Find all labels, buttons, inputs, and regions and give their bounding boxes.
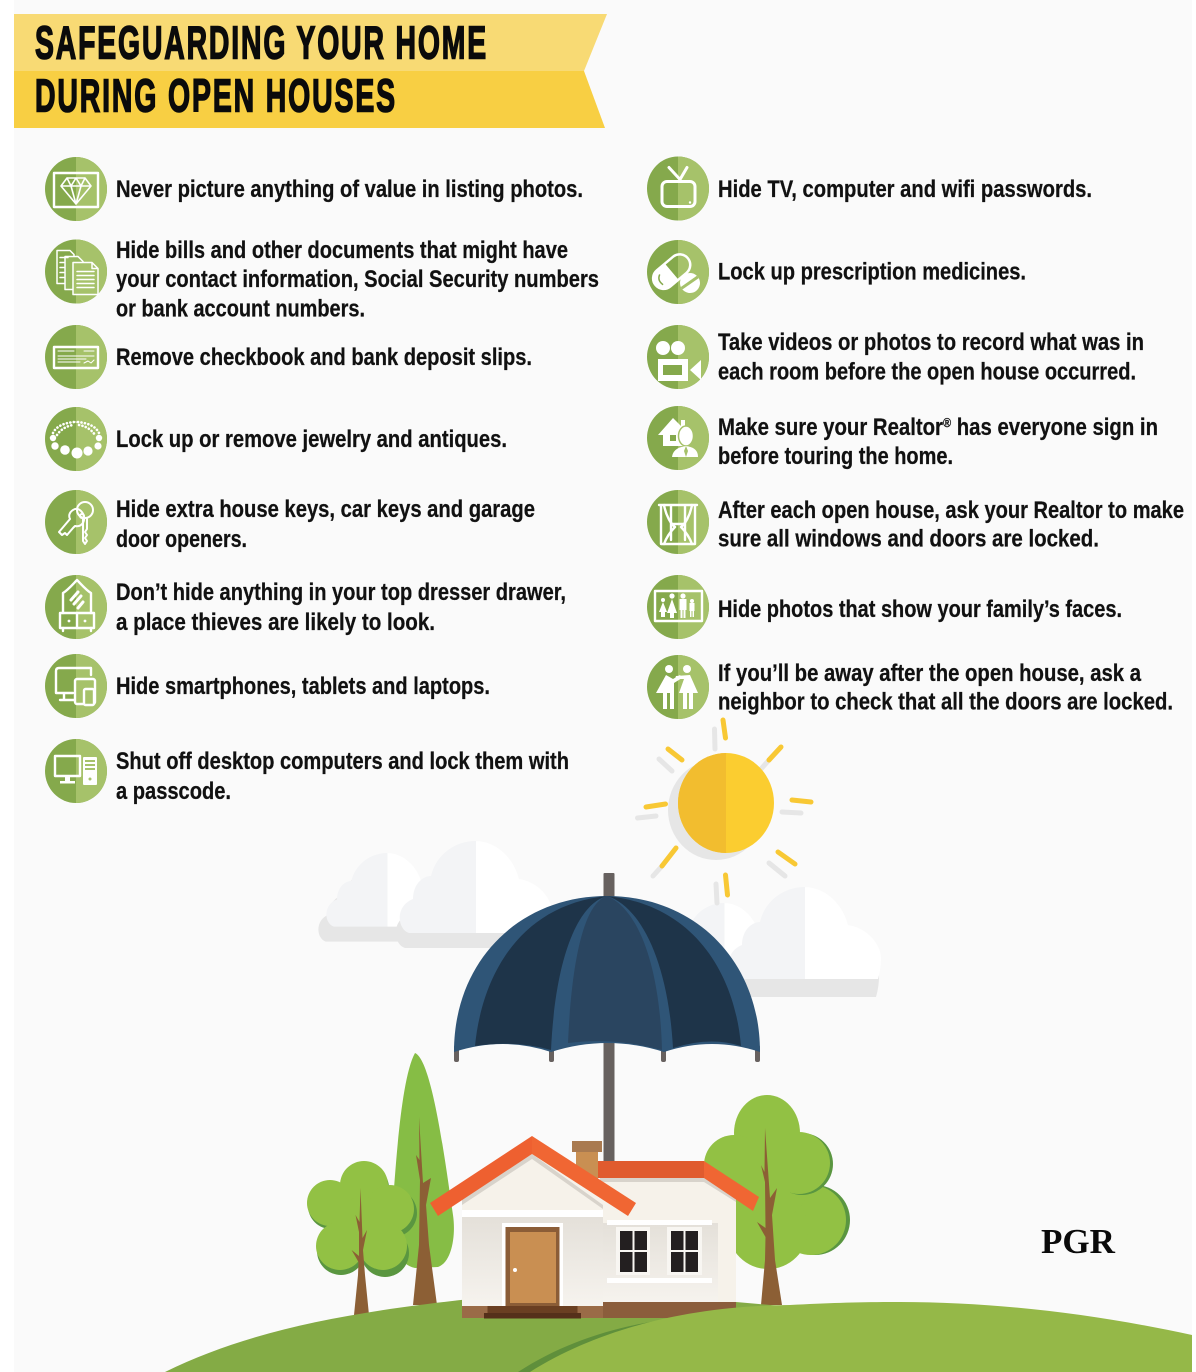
- icon: tv: [647, 156, 709, 220]
- tip text: Hide photos that show your family’s faces.: [718, 596, 1122, 623]
- chimney: [572, 1141, 602, 1182]
- icon: check: [45, 325, 107, 389]
- hill: back left: [165, 1299, 800, 1372]
- title: DURING OPEN HOUSES: [35, 70, 397, 122]
- hill: front right: [518, 1302, 1192, 1372]
- umbrella: [454, 873, 760, 1163]
- icon: keys: [45, 490, 107, 554]
- tip text: [718, 414, 1158, 470]
- tip text: [718, 660, 1173, 716]
- tip text: before touring the home.: [718, 443, 953, 470]
- house gable: [430, 1136, 636, 1318]
- tip text: has everyone sign in: [951, 414, 1158, 441]
- tip text: [718, 329, 1144, 386]
- tip text: [116, 237, 599, 322]
- credit: PGR: [1041, 1222, 1116, 1261]
- tip text: Shut off desktop computers and lock them with: [116, 748, 569, 775]
- title banner: [14, 14, 607, 128]
- icon: family photo: [647, 575, 709, 639]
- title: SAFEGUARDING YOUR HOME: [35, 16, 488, 68]
- icon: pearl necklace: [45, 407, 107, 471]
- tip text: a passcode.: [116, 778, 231, 805]
- tip text: Don’t hide anything in your top dresser drawer,: [116, 579, 566, 606]
- icon: pills: [647, 240, 709, 304]
- tip text: ®: [943, 415, 951, 430]
- tree: tall cypress: [392, 1053, 454, 1305]
- tip text: door openers.: [116, 526, 247, 553]
- icon: video camera: [647, 325, 709, 389]
- icon: documents: [45, 240, 107, 304]
- tip text: Remove checkbook and bank deposit slips.: [116, 344, 532, 371]
- tip text: Hide extra house keys, car keys and garage: [116, 496, 535, 523]
- icon: curtained window: [647, 490, 709, 554]
- tip text: Hide smartphones, tablets and laptops.: [116, 673, 490, 700]
- tree: small left: [307, 1161, 417, 1315]
- title: [35, 16, 488, 122]
- tip text: your contact information, Social Security numbers: [116, 266, 599, 293]
- icon: desktop computer: [45, 739, 107, 803]
- sun: [638, 720, 811, 903]
- icon: devices: [45, 654, 107, 718]
- panel: left tips: [45, 157, 599, 805]
- tip text: Never picture anything of value in listing photos.: [116, 176, 583, 203]
- icon: neighbors: [647, 655, 709, 719]
- panel: right tips: [647, 156, 1184, 719]
- tip text: Lock up or remove jewelry and antiques.: [116, 426, 507, 453]
- clouds: [318, 841, 881, 997]
- tip text: Make sure your Realtor: [718, 414, 983, 441]
- tip text: Hide TV, computer and wifi passwords.: [718, 176, 1092, 203]
- tip text: Lock up prescription medicines.: [718, 258, 1026, 286]
- tip text: [116, 748, 569, 805]
- icon: diamond photo: [45, 157, 107, 221]
- tip text: [116, 496, 535, 553]
- tip text: sure all windows and doors are locked.: [718, 526, 1099, 552]
- tip text: [718, 497, 1184, 552]
- icon: dresser: [45, 575, 107, 639]
- tip text: Hide bills and other documents that might have: [116, 237, 568, 264]
- house right wing: [598, 1161, 759, 1318]
- tip text: a place thieves are likely to look.: [116, 609, 435, 636]
- tip text: or bank account numbers.: [116, 296, 365, 322]
- tip text: [116, 579, 566, 636]
- tree: large right: [704, 1095, 850, 1305]
- house: [430, 1136, 759, 1318]
- door: [484, 1223, 581, 1318]
- icon: house and realtor: [647, 406, 709, 470]
- windows: [616, 1227, 702, 1275]
